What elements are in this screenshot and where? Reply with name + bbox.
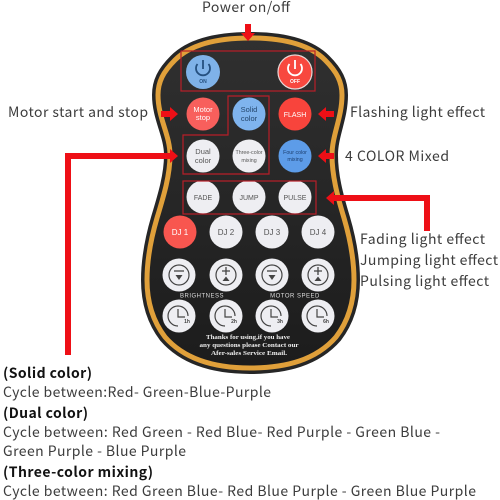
button: timer 3h: 3h [277, 319, 283, 325]
button: jump [232, 180, 266, 214]
button: timer 1h: 1h [184, 319, 190, 325]
service note on remote: Afer-sales Service Email. [211, 350, 287, 357]
button: timer 6h [302, 300, 334, 332]
button: three-color mixing: mixing [241, 158, 257, 164]
button: pulse: PULSE [284, 195, 307, 202]
button: ON: ON [199, 79, 207, 85]
button: fade: FADE [194, 195, 212, 202]
button: motor stop: Motor [193, 105, 213, 114]
button: motor stop [186, 98, 220, 130]
button: DJ 4 [302, 216, 334, 248]
button: dual color: Dual [195, 147, 211, 156]
button: pulse [278, 180, 312, 214]
button: OFF [278, 55, 312, 89]
text block: three-color mixing [3, 462, 476, 500]
button: motor speed up [302, 258, 334, 292]
remote control body [147, 38, 354, 368]
button: ON [186, 55, 220, 89]
label: fading, jumping, pulsing effects [360, 229, 499, 291]
button: three-color mixing: Three-color [235, 150, 263, 156]
button: timer 2h: 2h [231, 319, 237, 325]
button: DJ 3 [256, 216, 288, 248]
arrow: color modes explanation [65, 149, 178, 355]
service note on remote: any questions please Contact our [200, 342, 299, 349]
label: flashing light effect: Flashing light effect [350, 102, 486, 122]
button: dual color: color [195, 156, 212, 165]
button: jump: JUMP [239, 195, 259, 202]
button: timer 1h [162, 300, 196, 332]
text block: dual color: (Dual color) [3, 403, 88, 423]
label: 4 color mixed: 4 COLOR Mixed [345, 146, 449, 166]
button: flash [278, 98, 312, 130]
highlight box: fade jump pulse [183, 181, 316, 214]
button: brightness down [162, 258, 196, 292]
highlight box: color modes [183, 96, 269, 174]
button: motor speed down [256, 258, 288, 292]
button: DJ 2: DJ 2 [218, 228, 235, 237]
service note on remote: Thanks for using,if you have [206, 334, 290, 341]
button: four color mixing: mixing [287, 157, 303, 163]
text block: dual color: Green Purple - Blue Purple [3, 441, 186, 461]
button: DJ 4: DJ 4 [310, 228, 327, 237]
label: motor speed: MOTOR SPEED [270, 294, 320, 300]
arrow: four color mixed [318, 149, 334, 163]
button: DJ 2 [210, 216, 242, 248]
text block: dual color [3, 403, 440, 461]
text block: solid color: (Solid color) [3, 363, 92, 383]
arrow: fade jump pulse effects [326, 191, 430, 231]
button: DJ 3: DJ 3 [264, 228, 281, 237]
text block: dual color: Cycle between: Red Green - Red Blue- Red Purple - Green Blue - [3, 422, 440, 442]
label: fading, jumping, pulsing effects: Pulsing light effect [360, 271, 490, 291]
button: timer 2h [210, 300, 242, 332]
text block: three-color mixing: (Three-color mixing) [3, 462, 153, 482]
text block: solid color: Cycle between:Red- Green-Blue-Purple [3, 382, 271, 402]
button: four color mixing [278, 140, 312, 172]
service note on remote [200, 334, 299, 357]
arrow: motor start and stop [161, 107, 178, 121]
arrow: flashing light effect [318, 107, 334, 121]
button: solid color: Solid [241, 105, 257, 114]
arrow: power on/off [241, 24, 255, 41]
button: four color mixing: Four color [283, 150, 307, 156]
label: fading, jumping, pulsing effects: Jumping light effect [360, 250, 499, 270]
label: fading, jumping, pulsing effects: Fading light effect [360, 229, 486, 249]
button: motor stop: stop [196, 113, 210, 122]
button: DJ 1: DJ 1 [172, 228, 189, 237]
button: dual color [186, 140, 220, 172]
text block: solid color [3, 363, 271, 402]
button: brightness up [210, 258, 242, 292]
button: timer 3h [256, 300, 288, 332]
button: solid color: color [241, 114, 258, 123]
button: solid color [232, 98, 266, 130]
button: fade [186, 180, 220, 214]
button: DJ 1 [164, 216, 196, 248]
label: motor start and stop: Motor start and stop [8, 102, 148, 122]
button: three-color mixing [232, 140, 266, 172]
button: timer 6h: 6h [323, 319, 329, 325]
button: flash: FLASH [284, 112, 306, 119]
button: OFF: OFF [290, 79, 300, 85]
highlight box: power buttons [181, 51, 315, 91]
label: brightness: BRIGHTNESS [180, 294, 224, 300]
